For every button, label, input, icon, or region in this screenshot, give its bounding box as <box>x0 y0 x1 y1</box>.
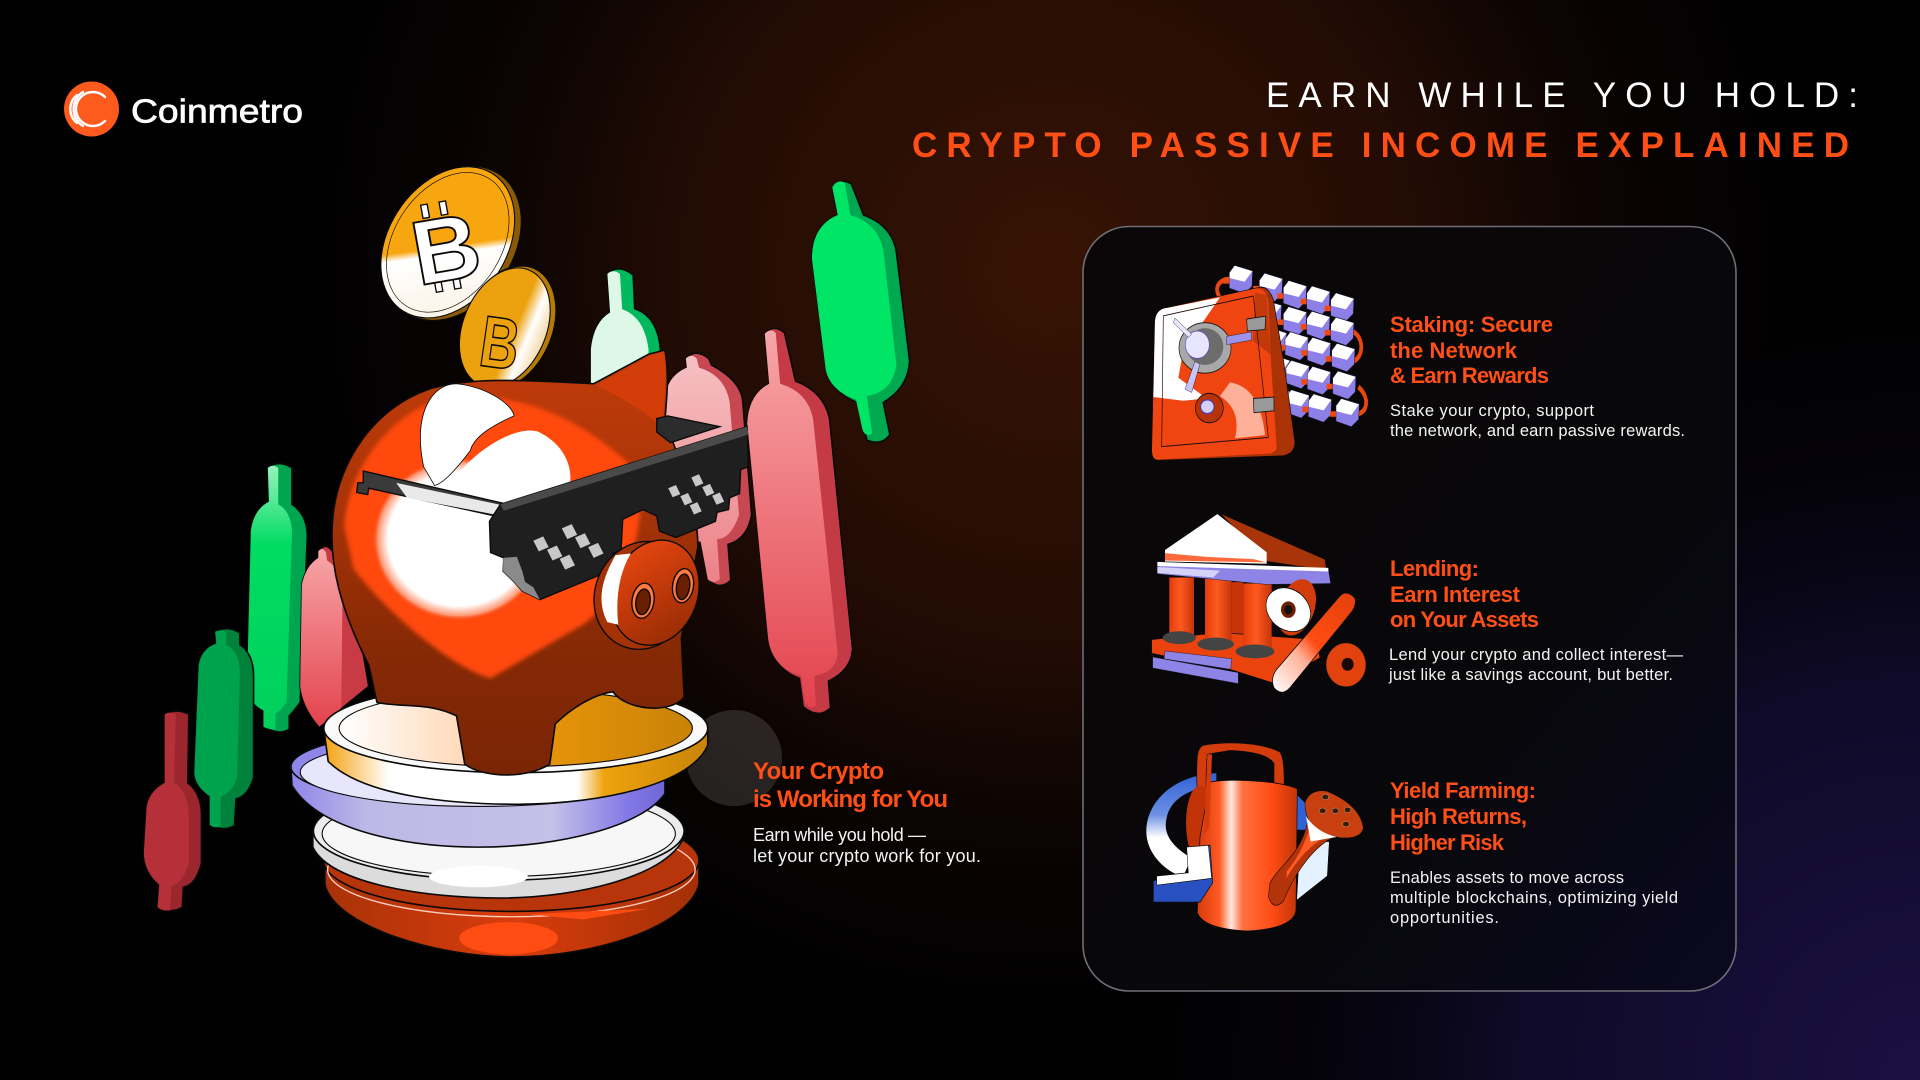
coin: small bitcoin: B <box>475 301 525 386</box>
candle: pink behind pig right <box>665 353 752 585</box>
staking body: the network, and earn passive rewards. <box>1390 422 1685 440</box>
pig snout <box>580 529 713 662</box>
callout: Your Crypto is Working for You <box>753 758 981 866</box>
callout body: Earn while you hold — <box>753 825 926 845</box>
glasses <box>357 416 748 600</box>
yield body: opportunities. <box>1390 909 1499 927</box>
staking heading: the Network <box>1390 338 1518 363</box>
lending heading: Earn Interest <box>1390 582 1521 607</box>
yield heading: Yield Farming: <box>1390 778 1536 803</box>
staking body: Stake your crypto, support <box>1390 402 1594 420</box>
candle: pink left behind pig <box>300 546 369 727</box>
candle: dark red far left <box>144 711 201 911</box>
icon: bitcoin B: B <box>404 193 488 305</box>
panel background <box>1083 226 1736 991</box>
yield heading: Higher Risk <box>1390 830 1505 855</box>
pig glow <box>373 458 546 621</box>
icon: watering can with arrow <box>1146 743 1363 931</box>
candle: large green top right <box>812 181 910 442</box>
candle: large red right <box>747 328 853 713</box>
lending heading: on Your Assets <box>1390 607 1539 632</box>
pig highlight 2 <box>451 431 570 510</box>
coin: red base <box>324 810 699 957</box>
coin: gold top <box>324 684 708 804</box>
yield body: Enables assets to move across <box>1390 869 1624 887</box>
coin: large bitcoin <box>353 141 550 346</box>
icon: bank with percent <box>1152 513 1366 692</box>
staking heading: & Earn Rewards <box>1390 363 1549 388</box>
item: staking <box>1390 312 1685 440</box>
staking heading: Staking: Secure <box>1390 312 1553 337</box>
piggy bank <box>332 350 748 775</box>
icon: Coinmetro mark <box>64 82 119 136</box>
coin stack <box>291 684 708 957</box>
panel: passive income methods <box>1083 226 1736 991</box>
icon: safe with chain <box>1152 265 1366 460</box>
coin: white <box>313 782 684 898</box>
callout heading: Your Crypto <box>753 758 884 785</box>
glasses pixels <box>533 474 724 570</box>
coin: small bitcoin <box>442 252 574 403</box>
title line 2: CRYPTO PASSIVE INCOME EXPLAINED <box>912 126 1849 165</box>
yield heading: High Returns, <box>1390 804 1527 829</box>
item: lending <box>1388 556 1684 684</box>
lending body: Lend your crypto and collect interest— <box>1389 646 1684 664</box>
logo: Coinmetro <box>64 82 303 136</box>
item: yield farming <box>1390 778 1678 927</box>
callout body: let your crypto work for you. <box>753 846 981 866</box>
wordmark: Coinmetro <box>131 92 303 130</box>
coin: purple <box>291 728 666 847</box>
decorative faint circle <box>686 710 782 806</box>
pig body <box>332 350 698 775</box>
lending body: just like a savings account, but better. <box>1388 666 1673 684</box>
candle: pale green behind pig <box>591 269 662 440</box>
lending heading: Lending: <box>1390 556 1479 581</box>
pig orange sheen <box>344 396 640 678</box>
pig highlight <box>420 384 514 486</box>
candle: dark green left <box>194 629 254 829</box>
illustration: piggy bank with coins and candles <box>144 141 910 957</box>
yield body: multiple blockchains, optimizing yield <box>1390 889 1678 907</box>
pig ear <box>596 352 665 429</box>
candle: bright green left <box>247 464 307 732</box>
title <box>912 76 1858 165</box>
title line 1: EARN WHILE YOU HOLD: <box>1266 76 1858 115</box>
callout heading: is Working for You <box>753 786 948 813</box>
